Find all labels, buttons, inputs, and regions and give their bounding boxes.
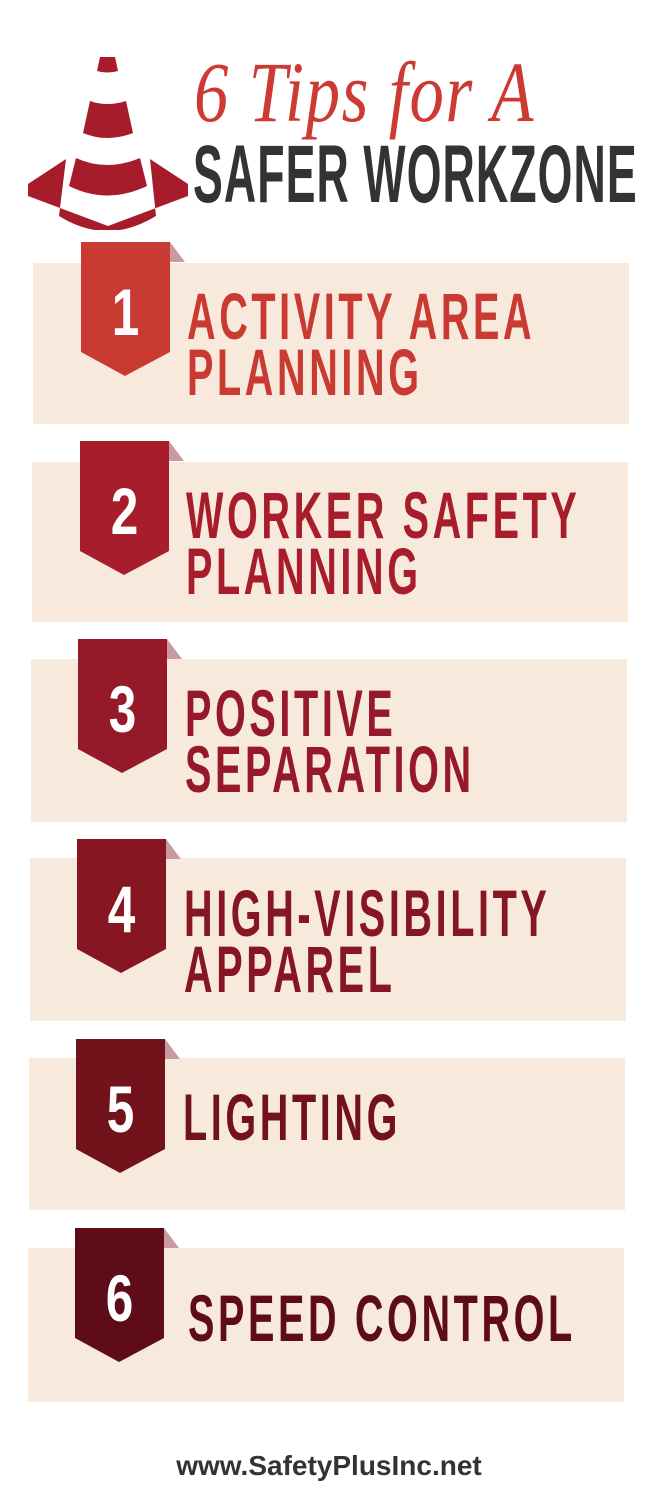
text: high-visibility apparel: HIGH-VISIBILITY [184, 876, 550, 950]
text: activity area planning: PLANNING [187, 335, 423, 409]
ribbon: 6 [75, 1228, 179, 1362]
title: 6 Tips for A: 6 Tips for A [194, 44, 535, 140]
panel: tip 2 [32, 441, 628, 622]
number 1: 1 [112, 275, 139, 349]
text: activity area planning [187, 279, 535, 409]
text: positive separation: SEPARATION [185, 732, 475, 806]
number 6: 6 [106, 1261, 133, 1335]
number 5: 5 [107, 1072, 134, 1146]
panel: tip 3 [31, 639, 627, 822]
text: speed control: SPEED CONTROL [188, 1281, 576, 1355]
ribbon: 3 [78, 639, 182, 773]
ribbon: 2 [80, 441, 184, 575]
panel: tip 6 [28, 1228, 624, 1402]
text: lighting: LIGHTING [183, 1080, 401, 1154]
text: worker safety planning [186, 478, 580, 608]
icon: traffic cone [28, 57, 188, 230]
footer: website: www.SafetyPlusInc.net [176, 1450, 482, 1481]
text: activity area planning: ACTIVITY AREA [187, 279, 535, 353]
text: high-visibility apparel: APPAREL [184, 932, 395, 1006]
ribbon: 4 [77, 839, 181, 973]
ribbon: 1 [81, 242, 185, 376]
number 2: 2 [111, 474, 138, 548]
panel: tip 1 [33, 242, 629, 424]
ribbon: 5 [76, 1039, 180, 1173]
text: positive separation: POSITIVE [185, 676, 396, 750]
text: worker safety planning: PLANNING [186, 534, 422, 608]
text: positive separation [185, 676, 475, 806]
number 3: 3 [109, 672, 136, 746]
panel: tip 5 [29, 1039, 625, 1210]
panel: tip 4 [30, 839, 626, 1021]
number 4: 4 [108, 872, 135, 946]
text: worker safety planning: WORKER SAFETY [186, 478, 580, 552]
text: high-visibility apparel [184, 876, 550, 1006]
title: SAFER WORKZONE: SAFER WORKZONE [193, 129, 638, 220]
